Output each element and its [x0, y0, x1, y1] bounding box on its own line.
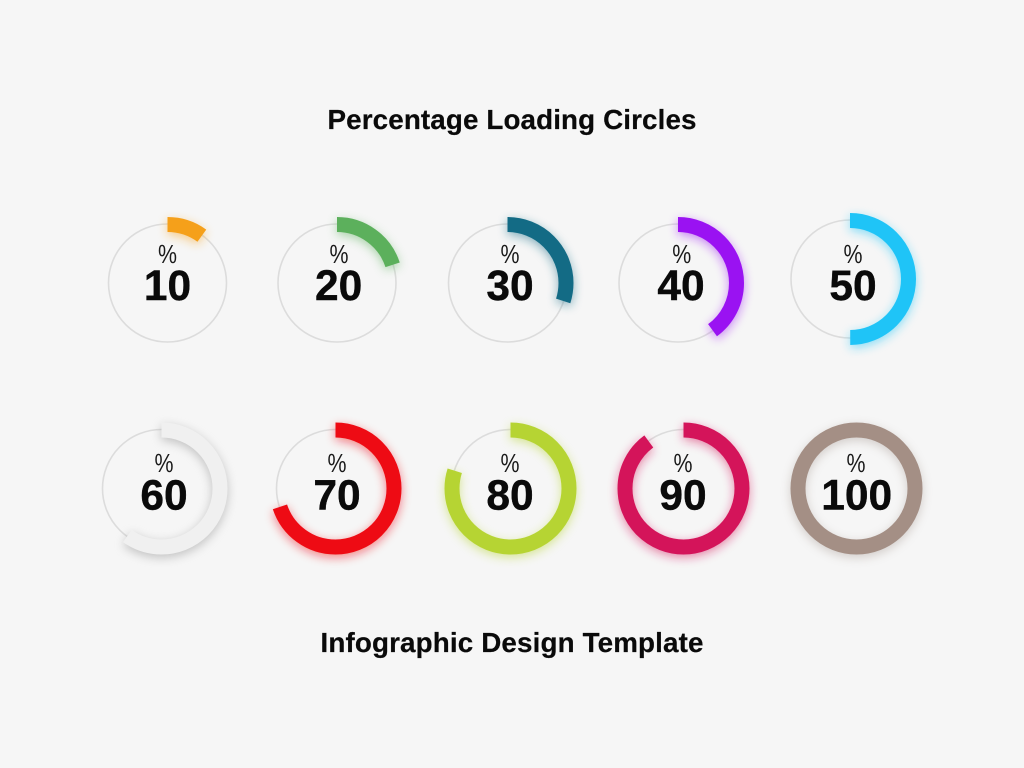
subtitle: Infographic Design Template — [320, 627, 704, 658]
loading circle: 60 percent: 60 — [140, 472, 188, 520]
loading circle: 20 percent: 20 — [315, 263, 362, 310]
loading circle: 90 percent — [624, 430, 742, 550]
loading circle: 90 percent: % — [674, 448, 692, 478]
loading circle: 10 percent: % — [158, 239, 177, 269]
loading circle: 70 percent: 70 — [313, 472, 361, 520]
loading circle: 40 percent: 40 — [657, 263, 705, 310]
loading circle: 70 percent: % — [328, 448, 346, 478]
loading circle: 30 percent: % — [500, 239, 520, 269]
loading circle: 70 percent — [276, 430, 394, 550]
loading circle: 60 percent: % — [154, 448, 174, 478]
loading circle: 60 percent — [102, 430, 220, 550]
loading circle: 30 percent — [448, 224, 566, 344]
loading circle: 30 percent: 30 — [486, 263, 534, 310]
loading circle: 20 percent: % — [330, 239, 348, 269]
loading circle: 100 percent: 100 — [821, 472, 892, 520]
loading circle: 80 percent — [452, 430, 570, 550]
loading circle: 40 percent: % — [672, 239, 691, 269]
loading circle: 90 percent: 90 — [659, 472, 707, 520]
loading circle: 80 percent: % — [500, 448, 520, 478]
loading circle: 20 percent — [278, 224, 396, 344]
loading circle: 10 percent — [108, 224, 226, 344]
loading circle: 40 percent — [619, 224, 737, 344]
loading circle: 100 percent — [798, 430, 915, 550]
loading circle: 50 percent — [791, 220, 909, 340]
loading circle: 50 percent: 50 — [829, 263, 877, 310]
loading circle: 100 percent: % — [846, 448, 866, 478]
loading circle: 80 percent: 80 — [486, 472, 534, 520]
title: Percentage Loading Circles — [328, 104, 696, 135]
loading circle: 10 percent: 10 — [144, 263, 191, 310]
loading circle: 50 percent: % — [844, 239, 862, 269]
